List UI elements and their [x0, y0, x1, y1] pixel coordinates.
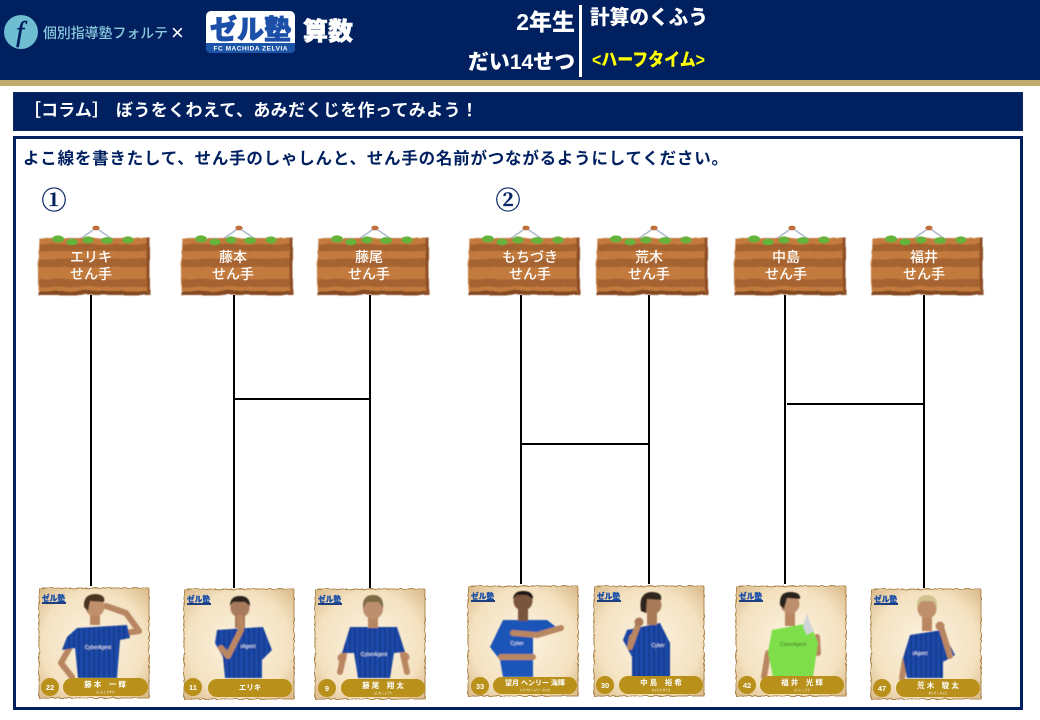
player card: Fujimoto: 22 — [46, 683, 54, 692]
player card: Mochizuki — [468, 586, 578, 696]
player card: Nakajima: 30 — [601, 681, 609, 690]
cross mark: × — [171, 20, 184, 45]
player card: Fujimoto: ゼル塾 — [42, 593, 65, 603]
sign: Erik: エリキ — [70, 249, 112, 265]
player card: Mochizuki: 33 — [476, 682, 484, 691]
player card: Fukui — [736, 586, 846, 696]
header band — [0, 0, 1040, 86]
player card: Araki: ゼル塾 — [874, 594, 897, 604]
player card: Araki: 荒 木 駿 太 — [917, 680, 959, 690]
sign: Fujio: せん手 — [348, 266, 390, 282]
column title bar: ぼうをくわえて、あみだくじを作ってみよう！ — [116, 101, 478, 120]
player card: Erik: ゼル塾 — [187, 594, 210, 604]
player card: Mochizuki: 望月 ヘンリー 海輝 — [505, 678, 565, 687]
player card: Erik — [184, 589, 294, 699]
sign: Fujio: 藤尾 — [355, 249, 383, 265]
player card: Erik: エリキ — [239, 683, 261, 692]
sign: Fujio — [317, 226, 429, 295]
player card: Fukui: CyberAgent — [780, 642, 807, 648]
player card: Nakajima: ゼル塾 — [597, 591, 620, 601]
player card: Nakajima: 中 島 裕 希 — [640, 677, 682, 687]
player card: Araki: 47 — [878, 684, 886, 693]
puzzle number 2: ② — [495, 181, 521, 217]
player card: Nakajima: Cyber — [651, 643, 665, 649]
sign: Nakajima: せん手 — [765, 266, 807, 282]
player card: Fujimoto — [39, 588, 149, 698]
player card: Fujimoto: ふじもと かずき — [96, 690, 115, 694]
player card: Fujio: CyberAgent — [361, 652, 388, 658]
sign: Fujimoto — [181, 226, 293, 295]
player card: Fukui: ふくい こうき — [794, 688, 811, 692]
player card: Mochizuki: Cyber — [510, 641, 524, 647]
sign: Fujimoto: せん手 — [212, 266, 254, 282]
header divider — [579, 5, 582, 77]
icon: Zeru-juku logo — [206, 11, 295, 53]
player card: Fukui: ゼル塾 — [739, 591, 762, 601]
player card: Fujio: ゼル塾 — [318, 594, 341, 604]
icon: Forte logo — [4, 15, 38, 49]
player card: Mochizuki: もちづき へんりー みつき — [520, 688, 550, 692]
sign: Mochizuki — [468, 226, 580, 295]
sign: Araki — [596, 226, 708, 295]
school name: 個別指導塾フォルテ — [43, 25, 168, 41]
player card: Fujimoto: 藤 本 一 輝 — [84, 679, 126, 689]
player card: Erik: 11 — [189, 683, 197, 692]
player card: Fujio: 9 — [325, 684, 329, 693]
sign: Nakajima: 中島 — [772, 249, 800, 265]
player card: Fujio: ふじお しょうた — [374, 691, 393, 695]
sign: Araki: せん手 — [628, 266, 670, 282]
player card: Araki — [871, 589, 981, 699]
column title bar: ［コラム］ — [24, 101, 109, 120]
column title bar — [14, 92, 1022, 130]
sign: Fukui — [871, 226, 983, 295]
sign: Erik: せん手 — [70, 266, 112, 282]
sign: Mochizuki: せん手 — [509, 266, 551, 282]
player card: Fujio: 藤 尾 翔 太 — [362, 680, 404, 690]
icon: Zeru-juku logo: ゼル塾 — [210, 14, 291, 45]
player card: Fukui: 42 — [743, 681, 751, 690]
player card: Araki: あらき しゅんた — [929, 691, 948, 695]
player card: Fukui: 福 井 光 輝 — [781, 677, 823, 687]
player card: Fujimoto: CyberAgent — [85, 645, 112, 651]
icon: Forte logo: f — [16, 17, 27, 48]
sign: Erik — [38, 226, 150, 295]
sign: Fukui: せん手 — [903, 266, 945, 282]
main panel — [14, 138, 1022, 708]
sign: Mochizuki: もちづき — [502, 249, 558, 265]
halftime label: <ハーフタイム> — [592, 50, 705, 70]
player card: Nakajima — [594, 586, 704, 696]
player card: Erik: rAgent — [241, 644, 256, 650]
puzzle number 1: ① — [41, 181, 67, 217]
amida lines: puzzle 1 — [91, 295, 370, 588]
sign: Araki: 荒木 — [635, 249, 663, 265]
player card: Mochizuki: ゼル塾 — [471, 591, 494, 601]
lesson title: 計算のくふう — [590, 5, 708, 29]
icon: Zeru-juku logo: FC MACHIDA ZELVIA — [214, 46, 288, 52]
player card: Fujio — [315, 589, 425, 699]
sign: Fukui: 福井 — [910, 249, 938, 265]
sign: Fujimoto: 藤本 — [219, 249, 247, 265]
amida lines: puzzle 2 — [521, 295, 924, 588]
instruction text: よこ線を書きたして、せん手のしゃしんと、せん手の名前がつながるようにしてください。 — [23, 148, 728, 168]
grade: 2年生 — [516, 9, 575, 35]
player card: Araki: rAgent — [913, 651, 928, 657]
sign: Nakajima — [734, 226, 846, 295]
subject: 算数 — [303, 17, 353, 46]
player card: Nakajima: なかじま ゆうき — [652, 688, 671, 692]
unit: だい14せつ — [468, 51, 575, 74]
